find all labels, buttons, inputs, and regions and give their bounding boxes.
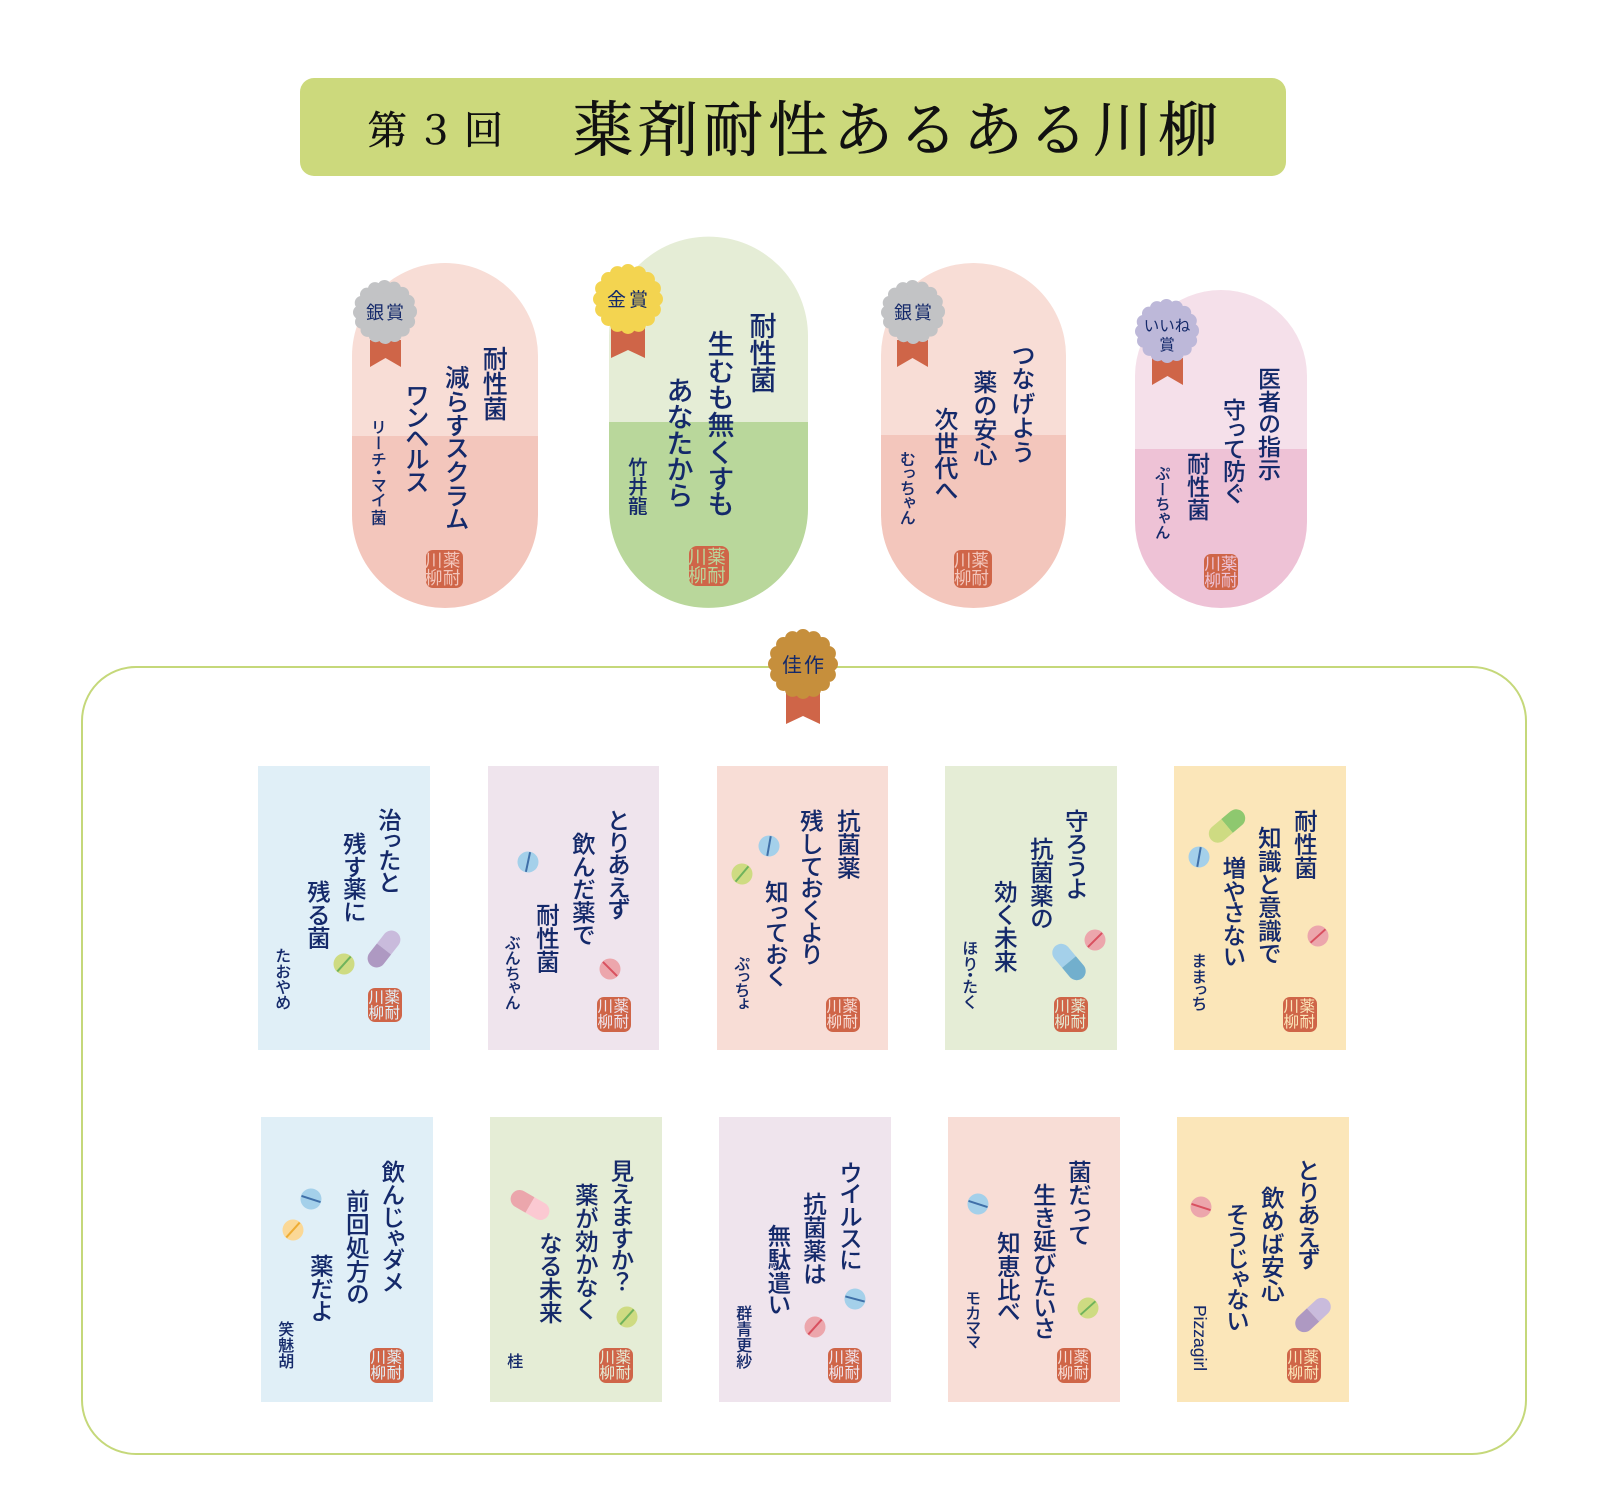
card: row 1 no 2: ぶんちゃん <box>502 935 521 1011</box>
card: row 2 no 2 <box>490 1117 662 1402</box>
panel: silver award 2: むっちゃん <box>897 451 915 527</box>
card: row 2 no 1: 薬耐 <box>384 1349 402 1381</box>
panel: gold award: 金賞 <box>607 289 651 311</box>
card: row 2 no 4: 菌だって <box>1065 1160 1091 1245</box>
card: row 1 no 1 <box>258 766 430 1050</box>
card: row 2 no 3: 群青更紗 <box>733 1305 752 1369</box>
panel: silver award 1: 銀賞 <box>366 303 406 323</box>
title banner: 第３回 <box>368 110 512 153</box>
card: row 2 no 1: 前回処方の <box>343 1189 370 1305</box>
card: row 2 no 2: 薬が効かなく <box>572 1183 599 1320</box>
panel: silver award 2: つなげよう <box>1007 346 1034 464</box>
panel: like award <box>1135 290 1307 608</box>
card: row 2 no 4 <box>948 1117 1120 1402</box>
card: row 1 no 5: 薬耐 <box>1297 998 1315 1030</box>
panel: honorable mention frame <box>82 667 1526 1454</box>
card: row 1 no 1: たおやめ <box>272 948 291 1011</box>
card: row 1 no 5: 知識と意識で <box>1255 826 1282 964</box>
card: row 2 no 5: とりあえず <box>1294 1159 1320 1270</box>
card: row 2 no 1: 飲んじゃダメ <box>378 1160 405 1292</box>
card: row 1 no 3: ぷっちょ <box>731 956 750 1010</box>
card: row 2 no 4: 知恵比べ <box>994 1231 1021 1321</box>
card: row 2 no 5: そうじゃない <box>1223 1203 1249 1331</box>
card: row 2 no 1: 薬だよ <box>307 1254 334 1322</box>
card: row 2 no 3: 川柳 <box>826 1349 844 1380</box>
panel: like award: 守って防ぐ <box>1219 398 1245 504</box>
card: row 1 no 1: 残る菌 <box>304 880 331 950</box>
card: row 1 no 4: ほり・たく <box>959 940 977 1009</box>
card: row 1 no 2: 耐性菌 <box>533 903 560 974</box>
panel: silver award 2: 銀賞 <box>894 303 934 323</box>
panel: gold award <box>600 237 808 608</box>
card: row 1 no 1: 残す薬に <box>340 832 367 923</box>
card: row 1 no 4: 守ろうよ <box>1062 809 1088 899</box>
card: row 2 no 2: 見えますか？ <box>607 1159 634 1291</box>
title banner <box>300 78 1286 176</box>
panel: silver award 1: 耐性菌 <box>479 346 508 421</box>
card: row 2 no 5: Pizzagirl <box>1190 1305 1210 1371</box>
card: row 2 no 1 <box>261 1117 433 1402</box>
card: row 1 no 3: 知っておく <box>762 880 789 987</box>
panel: gold award: 薬耐 <box>705 547 726 585</box>
card: row 2 no 2: 薬耐 <box>613 1349 631 1381</box>
card: row 2 no 2: 川柳 <box>597 1349 615 1380</box>
card: row 1 no 3: 薬耐 <box>840 998 858 1030</box>
badge: honorable mention <box>776 636 830 724</box>
card: row 1 no 2: 川柳 <box>595 998 613 1029</box>
card: row 1 no 1: 薬耐 <box>382 989 400 1021</box>
card: row 1 no 1: 治ったと <box>375 808 402 894</box>
card: row 2 no 3: 無駄遣い <box>764 1224 791 1315</box>
card: row 2 no 3: 薬耐 <box>842 1349 860 1381</box>
card: row 1 no 4: 薬耐 <box>1068 998 1086 1030</box>
card: row 2 no 4: 生き延びたいさ <box>1030 1183 1057 1340</box>
panel: gold award: 川柳 <box>686 547 707 584</box>
card: row 1 no 2: とりあえず <box>604 809 630 920</box>
card: row 1 no 3 <box>717 766 888 1050</box>
panel: silver award 1: 減らすスクラム <box>442 365 469 531</box>
card: row 2 no 1: 川柳 <box>368 1349 386 1380</box>
panel: silver award 1: ワンヘルス <box>402 384 429 493</box>
card: row 1 no 4: 効く未来 <box>991 880 1018 973</box>
card: row 1 no 5: 川柳 <box>1281 998 1299 1029</box>
card: row 1 no 5 <box>1174 766 1346 1050</box>
card: row 1 no 4: 抗菌薬の <box>1027 837 1054 930</box>
badge: honorable mention: 佳作 <box>782 654 826 677</box>
panel: like award: 川柳 <box>1202 555 1221 588</box>
card: row 2 no 3: ウイルスに <box>836 1161 862 1271</box>
panel: silver award 1: 川柳 <box>423 551 443 586</box>
panel: silver award 2 <box>881 263 1066 608</box>
card: row 1 no 2: 薬耐 <box>611 998 629 1030</box>
panel: silver award 2: 次世代へ <box>930 407 958 500</box>
card: row 2 no 2: なる未来 <box>536 1232 563 1324</box>
panel: like award: ぷーちゃん <box>1153 466 1171 541</box>
card: row 2 no 3 <box>719 1117 891 1402</box>
card: row 1 no 2: 飲んだ薬で <box>569 832 596 945</box>
card: row 1 no 3: 抗菌薬 <box>834 809 861 880</box>
panel: gold award: 生むも無くすも <box>704 330 734 518</box>
card: row 1 no 5: 耐性菌 <box>1291 809 1318 880</box>
card: row 2 no 4: 薬耐 <box>1071 1349 1089 1381</box>
panel: silver award 2: 川柳 <box>952 551 972 586</box>
card: row 2 no 5: 薬耐 <box>1301 1349 1319 1381</box>
panel: like award: 薬耐 <box>1218 555 1237 589</box>
card: row 1 no 4: 川柳 <box>1052 998 1070 1029</box>
panel: silver award 1: リーチ・マイ菌 <box>368 419 387 527</box>
panel: like award: 賞 <box>1159 336 1175 354</box>
card: row 1 no 3: 残しておくより <box>797 809 824 965</box>
panel: gold award: 竹井龍 <box>624 457 647 516</box>
card: row 2 no 4: モカママ <box>962 1290 980 1349</box>
card: row 1 no 2 <box>488 766 659 1050</box>
panel: gold award: あなたから <box>663 378 693 509</box>
card: row 2 no 2: 桂 <box>504 1353 523 1369</box>
panel: silver award 2: 薬の安心 <box>969 370 997 466</box>
card: row 1 no 3: 川柳 <box>824 998 842 1029</box>
panel: like award: 耐性菌 <box>1183 452 1210 521</box>
panel: silver award 2: 薬耐 <box>970 551 990 587</box>
panel: silver award 1 <box>352 263 538 608</box>
panel: gold award: 耐性菌 <box>746 312 776 393</box>
title banner: 薬剤耐性あるある川柳 <box>573 98 1223 164</box>
card: row 2 no 5 <box>1177 1117 1349 1402</box>
card: row 2 no 5: 川柳 <box>1285 1349 1303 1380</box>
card: row 1 no 4 <box>945 766 1117 1050</box>
panel: like award: 医者の指示 <box>1254 367 1281 481</box>
card: row 2 no 3: 抗菌薬は <box>800 1192 827 1285</box>
panel: silver award 1: 薬耐 <box>441 551 461 587</box>
card: row 1 no 5: ままっち <box>1188 953 1206 1011</box>
card: row 2 no 1: 笑魅胡 <box>275 1321 294 1370</box>
card: row 2 no 4: 川柳 <box>1055 1349 1073 1380</box>
card: row 1 no 5: 増やさない <box>1219 856 1246 967</box>
card: row 1 no 1: 川柳 <box>366 989 384 1020</box>
card: row 2 no 5: 飲めば安心 <box>1258 1186 1285 1302</box>
panel: like award: いいね <box>1144 317 1191 335</box>
